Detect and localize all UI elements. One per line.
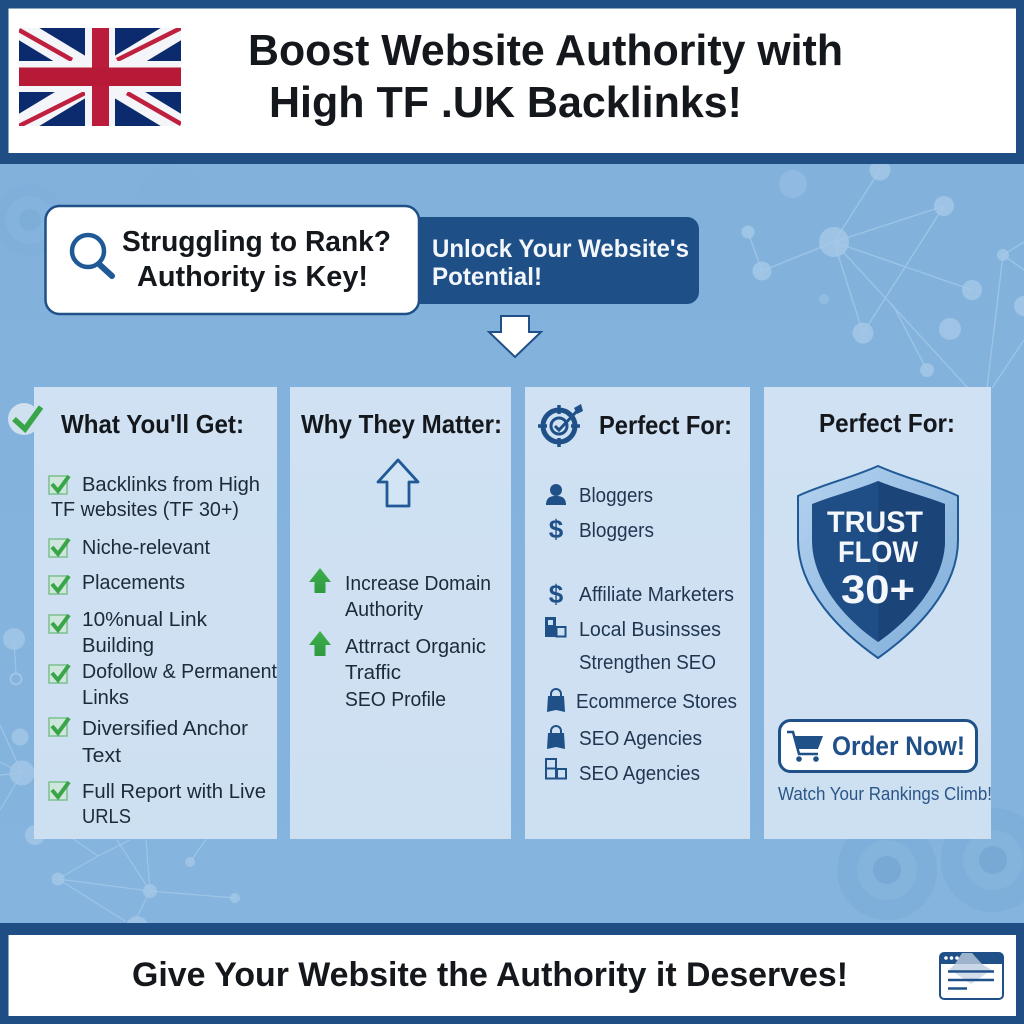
background network: bottom left [0, 628, 240, 938]
title: Boost Website Authority with [248, 26, 843, 75]
list item: seo agencies building: SEO Agencies [579, 762, 700, 785]
callout text [122, 226, 391, 293]
list item: local businesses: Local Businsses [579, 618, 721, 641]
icon: target [538, 404, 583, 447]
heading: Why They Matter: [301, 409, 502, 439]
list item: niche: Niche-relevant [82, 536, 210, 559]
list item: ecommerce stores: Ecommerce Stores [576, 690, 737, 713]
list item: manual link building: 10%nual Link [82, 608, 208, 631]
list item: dofollow: Links [82, 686, 129, 709]
icon: trust flow shield [798, 466, 958, 658]
button: order now: Order Now! [832, 731, 965, 761]
list item: backlinks: Backlinks from High [82, 473, 260, 496]
icon: trust flow shield: 30+ [841, 568, 915, 612]
icon: cart [787, 732, 823, 762]
icon: outline up arrow [378, 460, 418, 506]
list item: bloggers: Bloggers [579, 484, 653, 507]
callout text: Authority is Key! [137, 261, 368, 293]
list item: bloggers dollar: Bloggers [579, 519, 654, 542]
panel: why they matter [290, 387, 511, 839]
list item: seo agencies bag: SEO Agencies [579, 727, 702, 750]
arrow: down [489, 316, 541, 357]
panel: trust flow and order [764, 387, 992, 839]
background [0, 164, 1024, 924]
list item: full report: Full Report with Live [82, 780, 266, 803]
heading: Perfect For: [819, 408, 955, 438]
callout text: Struggling to Rank? [122, 226, 391, 258]
list item: seo agencies building [546, 759, 700, 785]
footer text: Give Your Website the Authority it Deserves! [132, 956, 848, 994]
list item: backlinks [49, 473, 260, 521]
heading: Perfect For: [599, 410, 732, 440]
icon: browser window [940, 953, 1003, 999]
background network: top right [742, 160, 1024, 388]
callout: unlock potential [410, 217, 699, 304]
list item: bloggers [546, 484, 653, 507]
icon: trust flow shield: TRUST [827, 506, 923, 539]
list item: increase domain authority [309, 568, 491, 621]
list item: attract organic traffic: Attrract Organic [345, 635, 486, 658]
button: order now [780, 720, 976, 772]
list item: manual link building: Building [82, 634, 154, 657]
list item: full report: URLS [82, 805, 131, 828]
text: strengthen seo: Strengthen SEO [579, 651, 716, 674]
panel: perfect for audience [525, 387, 750, 839]
title [248, 26, 843, 127]
list item: affiliate marketers [549, 579, 734, 609]
background rings: top left [0, 163, 202, 256]
icon: magnifying glass [72, 235, 112, 276]
callout: struggling to rank [46, 206, 419, 314]
list item: bloggers dollar: $ [549, 514, 564, 544]
callout: unlock potential: Unlock Your Website's [432, 235, 689, 263]
list item: affiliate marketers: $ [549, 579, 564, 609]
list item: increase domain authority: Increase Domain [345, 572, 491, 595]
header banner [0, 0, 1024, 164]
icon: trust flow shield: FLOW [838, 536, 919, 569]
background rings: bottom right [837, 808, 1024, 920]
list item: increase domain authority: Authority [345, 598, 424, 621]
list item: dofollow: Dofollow & Permanent [82, 660, 277, 683]
list item: placements: Placements [82, 571, 185, 594]
list item: manual link building [49, 608, 208, 657]
list item: anchor text: Diversified Anchor [82, 717, 248, 740]
list item: attract organic traffic: SEO Profile [345, 688, 446, 711]
list item: backlinks: TF websites (TF 30+) [51, 498, 239, 521]
list item: affiliate marketers: Affiliate Marketers [579, 583, 734, 606]
list item: attract organic traffic: Traffic [345, 661, 401, 684]
list item: full report [49, 780, 266, 828]
text: watch your rankings climb: Watch Your Rankings Climb! [778, 784, 992, 804]
heading: What You'll Get: [61, 409, 244, 439]
callout: unlock potential: Potential! [432, 263, 542, 291]
list item: anchor text [49, 717, 248, 767]
title: High TF .UK Backlinks! [269, 78, 742, 127]
list item: attract organic traffic [309, 631, 486, 711]
list item: anchor text: Text [82, 744, 121, 767]
footer banner [0, 923, 1024, 1024]
icon: heading check [8, 403, 41, 435]
icon: union jack flag [19, 28, 181, 126]
list item: dofollow [49, 660, 277, 709]
list item: bloggers dollar [549, 514, 654, 544]
panel: what you'll get [8, 387, 277, 839]
